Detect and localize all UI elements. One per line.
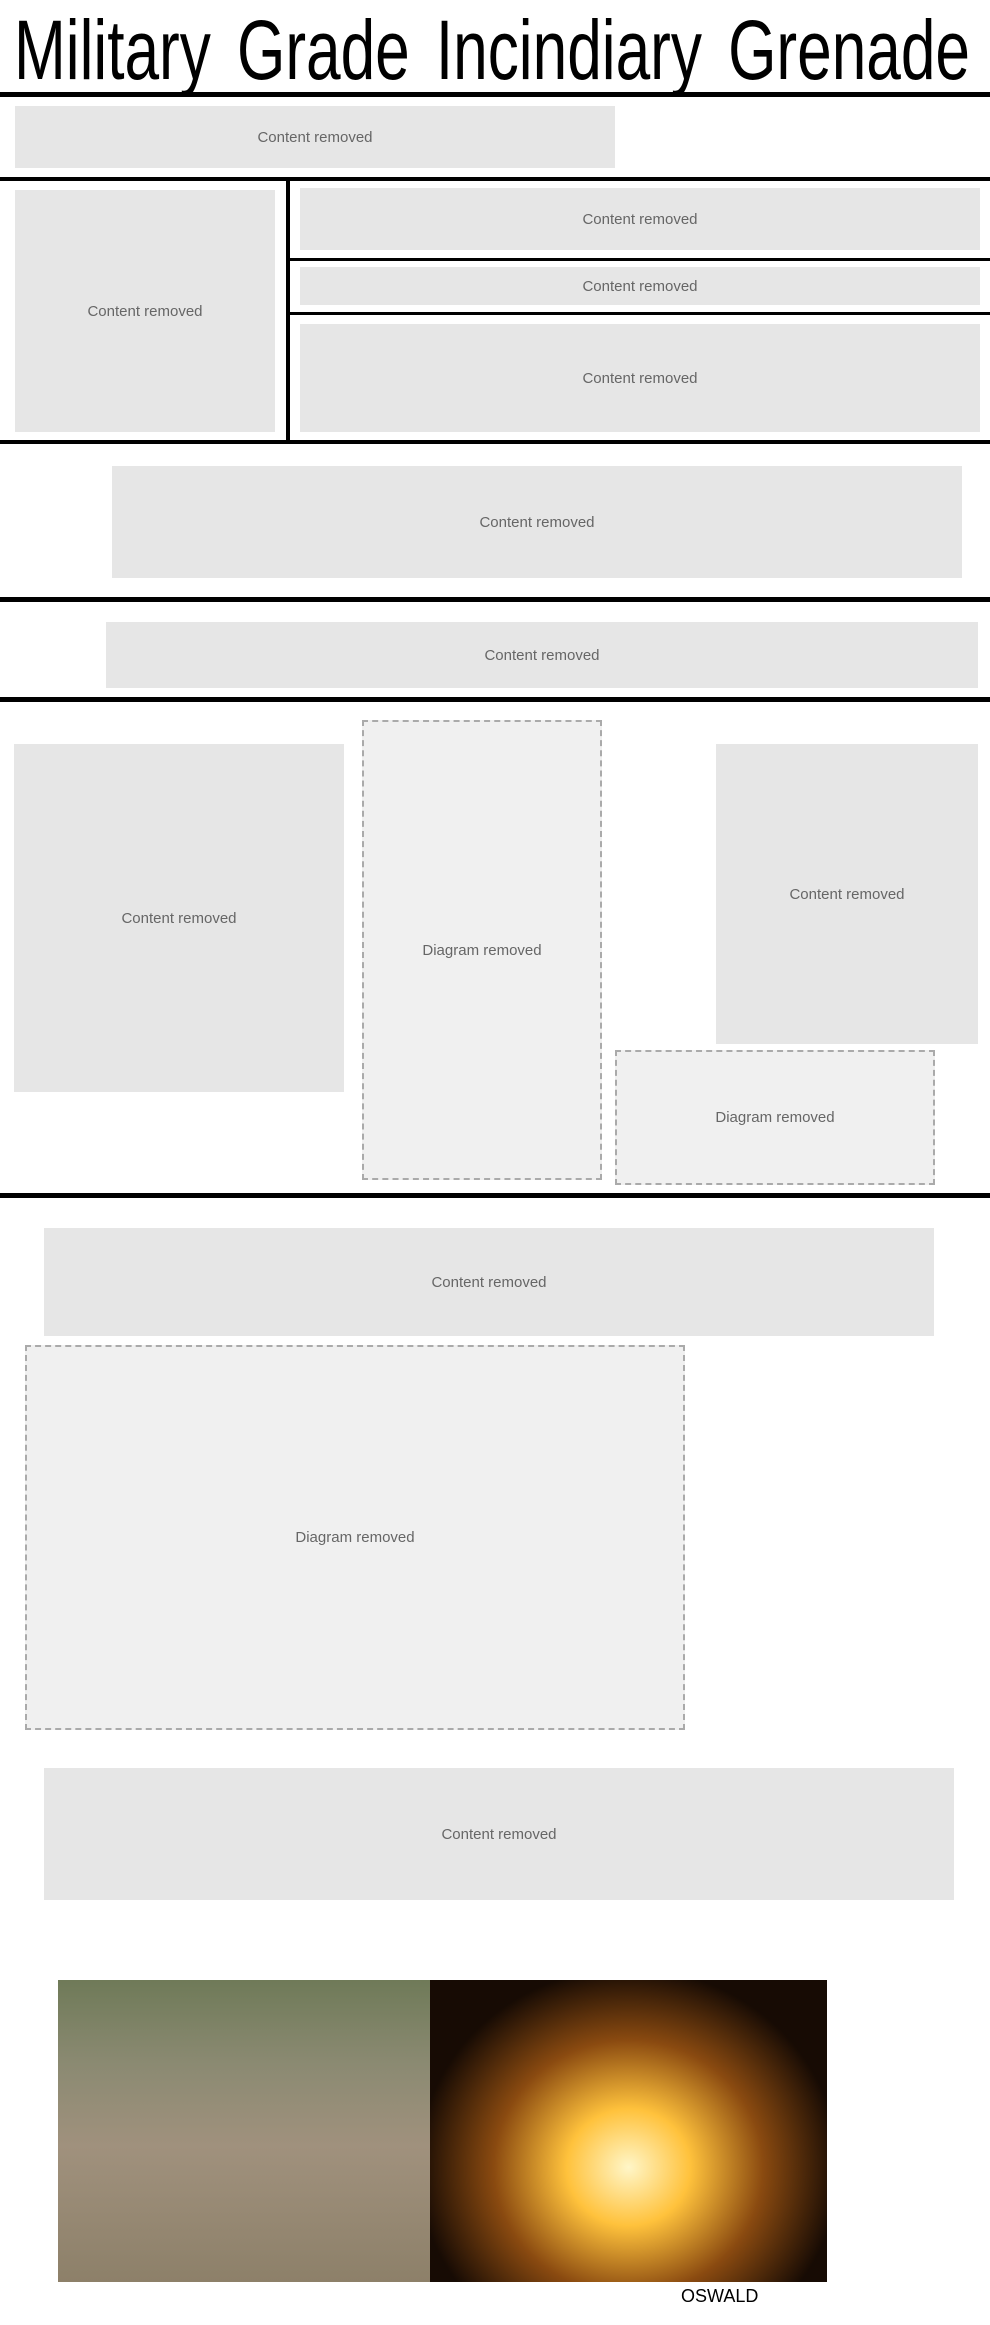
panel: lower right placeholder — [300, 324, 980, 432]
text block: section three placeholder: Content removed — [484, 646, 600, 664]
text block: section six placeholder — [44, 1768, 954, 1900]
text block: section three placeholder — [106, 622, 978, 688]
text block: section four left placeholder — [14, 744, 344, 1092]
text block: intro placeholder — [15, 106, 615, 168]
panel: lower right placeholder: Content removed — [582, 370, 698, 386]
text block: intro placeholder: Content removed — [257, 128, 373, 146]
title: Military Grade Incindiary Grenade — [14, 3, 970, 97]
diagram placeholder: lower right: Diagram removed — [715, 1109, 835, 1126]
text block: section five placeholder: Content removed — [431, 1274, 547, 1290]
photo placeholder: right — [430, 1980, 827, 2282]
panel: left list placeholder — [15, 190, 275, 432]
text block: section five placeholder — [44, 1228, 934, 1336]
diagram placeholder: section five — [25, 1345, 685, 1730]
diagram placeholder: center: Diagram removed — [422, 942, 542, 958]
panel: left list placeholder: Content removed — [87, 302, 203, 320]
signature: OSWALD — [681, 2286, 758, 2306]
photo placeholder: left — [58, 1980, 430, 2282]
diagram placeholder: section five: Diagram removed — [295, 1529, 415, 1546]
text block: section four right placeholder — [716, 744, 978, 1044]
panel: middle right placeholder: Content removed — [582, 278, 698, 294]
text block: section four left placeholder: Content removed — [121, 910, 237, 926]
diagram placeholder: center — [362, 720, 602, 1180]
panel: upper right placeholder — [300, 188, 980, 250]
text block: section two placeholder — [112, 466, 962, 578]
text block: section four right placeholder: Content removed — [789, 886, 905, 902]
panel: middle right placeholder — [300, 267, 980, 305]
text block: section six placeholder: Content removed — [441, 1826, 557, 1842]
panel: upper right placeholder: Content removed — [582, 210, 698, 228]
diagram placeholder: lower right — [615, 1050, 935, 1185]
text block: section two placeholder: Content removed — [479, 514, 595, 530]
